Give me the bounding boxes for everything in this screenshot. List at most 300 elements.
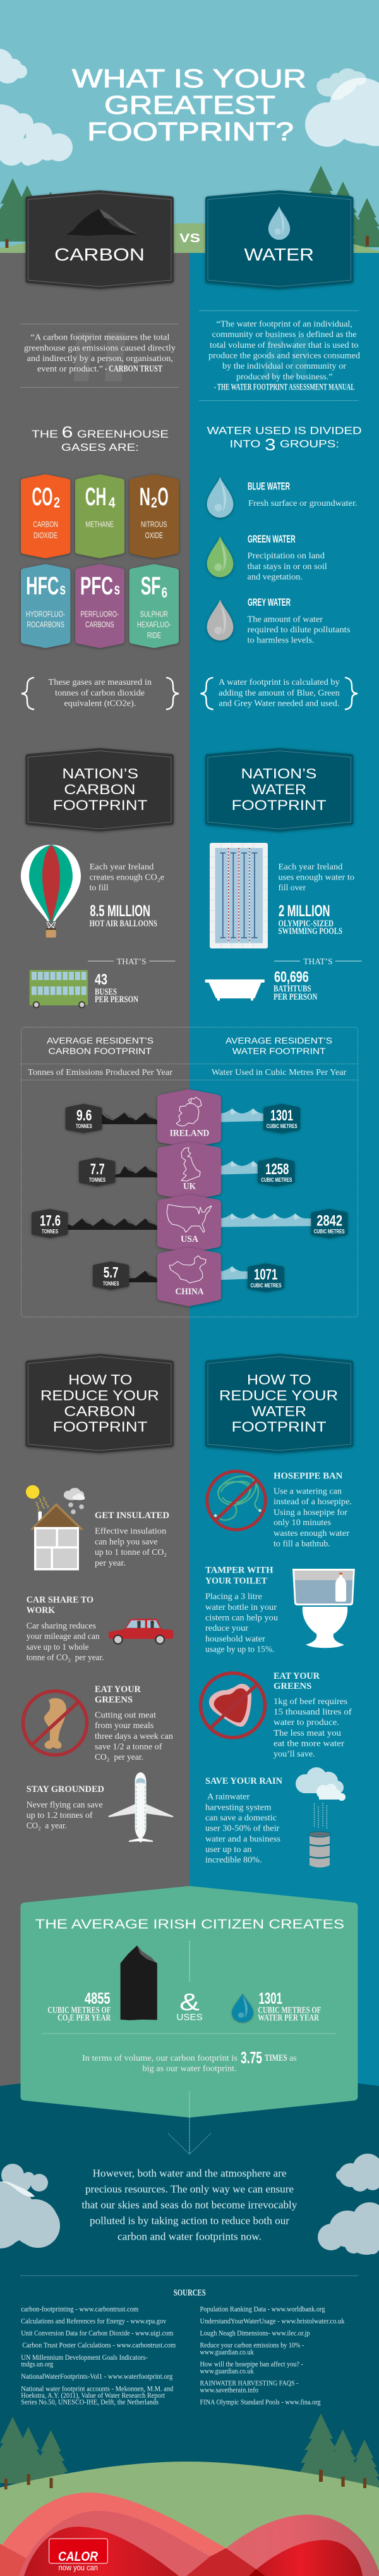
tip: car share to work: tonne of CO₂ per year. bbox=[27, 1653, 104, 1663]
text: water footprint definition bbox=[208, 320, 360, 392]
badge: nation's carbon footprint: FOOTPRINT bbox=[53, 797, 147, 813]
text: water footprint definition: by the individual or community or bbox=[222, 362, 346, 371]
tip: tamper with your toilet: YOUR TOILET bbox=[205, 1576, 267, 1586]
sources: left column: Series No.50, UNESCO-IHE, Delft, the Netherlands bbox=[21, 2399, 159, 2407]
tip: car share to work: WORK bbox=[27, 1605, 56, 1616]
icon: coal column bbox=[121, 1946, 157, 2020]
stat: 4855 bbox=[47, 1990, 111, 2023]
note: tonnes of carbon dioxide equivalent bbox=[21, 678, 179, 709]
label: that's, water bbox=[274, 957, 361, 967]
value: ireland tonnes: 9.6 bbox=[76, 1107, 92, 1124]
text: ireland water stat: OLYMPIC-SIZED bbox=[278, 919, 334, 929]
tip: save your rain bbox=[205, 1776, 283, 1865]
note: tonnes of carbon dioxide equivalent: equivalent (tCO2e). bbox=[64, 699, 136, 709]
sources: right column: www.guardian.co.uk bbox=[200, 2349, 254, 2357]
stat: bathtubs per person: 60,696 bbox=[274, 969, 309, 986]
sources: right column: Lough Neagh Dimensions- www.ilec.or.jp bbox=[200, 2330, 310, 2338]
tip: car share to work: your mileage and can bbox=[27, 1632, 100, 1641]
stat: 4855: 4855 bbox=[85, 1990, 111, 2008]
heading: average resident's water footprint: AVERAGE RESIDENT’S bbox=[226, 1036, 332, 1046]
tip: hosepipe ban bbox=[274, 1471, 352, 1549]
text: carbon footprint definition bbox=[24, 333, 176, 374]
icon: no hosepipe bbox=[207, 1471, 265, 1530]
ampersand and uses bbox=[176, 1989, 203, 2023]
text: ireland water stat: 2 MILLION bbox=[279, 902, 330, 920]
sources: right column: www.guardian.co.uk bbox=[200, 2368, 254, 2376]
sources: right column: www.savetherain.info bbox=[200, 2387, 258, 2395]
cloud: right large bbox=[305, 78, 379, 147]
icon: red car bbox=[109, 1619, 173, 1644]
quote mark: carbon bbox=[74, 333, 126, 381]
gas card: carbon dioxide: CARBON bbox=[33, 520, 58, 529]
water type: grey: required to dilute pollutants bbox=[248, 625, 350, 635]
gas card: perfluorocarbons bbox=[75, 564, 124, 648]
icon: water drop bbox=[268, 206, 290, 240]
icon: water drop bbox=[232, 1994, 253, 2022]
text: ireland co2 stat bbox=[90, 862, 164, 929]
tip: save your rain: SAVE YOUR RAIN bbox=[205, 1776, 283, 1786]
tip: get insulated bbox=[95, 1511, 169, 1568]
sources: left column: UN Millennium Development Goals Indicators- bbox=[21, 2354, 148, 2362]
gas card: perfluorocarbons: PFC bbox=[80, 572, 113, 600]
tip: eat your greens, carbon: three days a week can bbox=[95, 1732, 173, 1741]
bar: usa water waves bbox=[221, 1213, 311, 1227]
note: water footprint calculation bbox=[201, 678, 358, 709]
value: ireland tonnes: TONNES bbox=[76, 1123, 92, 1130]
bar: ireland coal mountains bbox=[102, 1112, 157, 1124]
tip: stay grounded bbox=[27, 1784, 104, 1831]
closing statement: carbon and water footprints now. bbox=[117, 2231, 262, 2243]
country: china bbox=[157, 1248, 221, 1306]
label: that's, water: THAT’S bbox=[303, 957, 333, 967]
label: carbon: CARBON bbox=[54, 245, 145, 264]
tip: eat your greens, carbon bbox=[95, 1684, 173, 1762]
cloud: dark section left highlight bbox=[0, 2181, 35, 2197]
sources: right column: Population Ranking Data - www.worldbank.org bbox=[200, 2306, 325, 2314]
tip: eat your greens, water: you’ll save. bbox=[274, 1750, 315, 1759]
tip: save your rain: harvesting system bbox=[205, 1803, 272, 1812]
stat: bathtubs per person: BATHTUBS bbox=[274, 984, 311, 994]
sources: right column: FINA Olympic Standard Pools - www.fina.org bbox=[200, 2399, 321, 2407]
comparison statement: In terms of volume, our carbon footprint is bbox=[82, 2054, 238, 2063]
gas card: hydrofluorocarbons: HYDROFLUO- bbox=[26, 610, 65, 618]
tip: get insulated: per year. bbox=[95, 1559, 126, 1568]
stat: 1301 bbox=[258, 1990, 321, 2023]
text: water footprint definition: total volume of freshwater that is used to bbox=[210, 341, 359, 350]
title: WHAT IS YOUR bbox=[72, 64, 306, 93]
value: usa tonnes: TONNES bbox=[42, 1229, 58, 1236]
value: china cubic metres: CUBIC METRES bbox=[250, 1282, 282, 1289]
tip: eat your greens, water: GREENS bbox=[274, 1681, 311, 1691]
tip: hosepipe ban: only 10 minutes bbox=[274, 1518, 331, 1528]
icon: bathtub bbox=[205, 979, 265, 1000]
heading: average resident's water footprint: WATER FOOTPRINT bbox=[232, 1046, 326, 1056]
cloud: right small translucent bbox=[316, 68, 366, 100]
tip: hosepipe ban: wastes enough water bbox=[274, 1529, 349, 1538]
tip: save your rain: water and a business bbox=[205, 1834, 280, 1844]
tree: bottom right bbox=[298, 2413, 379, 2487]
cloud: dark section right bbox=[318, 2154, 379, 2255]
tip: tamper with your toilet: TAMPER WITH bbox=[205, 1566, 274, 1576]
badge: nation's water footprint: NATION’S bbox=[241, 766, 316, 782]
country: uk bbox=[157, 1142, 221, 1201]
tip: hosepipe ban: Use a watering can bbox=[274, 1487, 342, 1496]
vs label: VS bbox=[179, 232, 200, 245]
comparison statement: big as our water footprint. bbox=[142, 2064, 237, 2074]
badge: how to reduce water footprint: WATER bbox=[251, 1403, 306, 1419]
gas card: methane bbox=[75, 474, 124, 558]
panel: water column background bbox=[190, 253, 379, 2106]
badge: nation's carbon footprint: NATION’S bbox=[62, 766, 138, 782]
heading: water divided into 3 groups: 3 bbox=[265, 435, 275, 454]
title: FOOTPRINT? bbox=[87, 117, 294, 146]
tip: car share to work: save up to 1 whole bbox=[27, 1643, 89, 1652]
water type: green: Precipitation on land bbox=[248, 551, 325, 561]
text: carbon footprint definition: and indirectly by a person, organisation, bbox=[27, 354, 173, 364]
gas card: hydrofluorocarbons: ROCARBONS bbox=[27, 620, 64, 629]
icon: airplane bbox=[109, 1772, 173, 1843]
water type: blue bbox=[207, 477, 358, 518]
tip: eat your greens, water: 15 thousand litres of bbox=[274, 1708, 352, 1717]
value: china tonnes bbox=[93, 1261, 129, 1290]
dotted dividers in summary panel bbox=[42, 1941, 336, 2033]
tree trunks: bottom bbox=[4, 2470, 366, 2489]
tree: top right bbox=[298, 166, 379, 247]
tip: eat your greens, water: eat the more water bbox=[274, 1739, 344, 1749]
heading: the 6 greenhouse gases bbox=[32, 424, 169, 453]
value: ireland cubic metres: CUBIC METRES bbox=[267, 1123, 298, 1130]
quote mark: water bbox=[263, 337, 310, 378]
value: usa cubic metres: CUBIC METRES bbox=[314, 1229, 345, 1236]
tip: get insulated: Effective insulation bbox=[95, 1527, 166, 1536]
tip: hosepipe ban: Using a hosepipe for bbox=[274, 1508, 347, 1518]
tip: eat your greens, carbon: CO₂ per year. bbox=[95, 1753, 143, 1762]
water type: green: and vegetation. bbox=[248, 573, 303, 582]
value: uk cubic metres: CUBIC METRES bbox=[261, 1177, 292, 1184]
gas card: nitrous oxide: O bbox=[158, 483, 169, 511]
tip: eat your greens, water bbox=[274, 1671, 352, 1759]
tip: eat your greens, carbon: GREENS bbox=[95, 1695, 133, 1705]
tip: eat your greens, water: water to produce. bbox=[274, 1718, 339, 1727]
cloud: upper left bbox=[0, 49, 27, 83]
country: usa bbox=[157, 1194, 221, 1253]
closing statement: polluted is by taking action to reduce both our bbox=[90, 2215, 290, 2227]
value: china tonnes: TONNES bbox=[103, 1280, 119, 1287]
hill: bottom ground bbox=[0, 2462, 379, 2576]
heading: average resident's water footprint bbox=[226, 1036, 332, 1056]
note: water footprint calculation: adding the amount of Blue, Green bbox=[219, 689, 340, 698]
stat: 4855: CUBIC METRES OF bbox=[47, 2005, 111, 2015]
sources: right column: RAINWATER HARVESTING FAQS - bbox=[200, 2380, 298, 2388]
heading: sources: SOURCES bbox=[174, 2288, 206, 2298]
tip: eat your greens, carbon: EAT YOUR bbox=[95, 1684, 141, 1695]
tip: car share to work bbox=[27, 1595, 104, 1663]
text: carbon footprint definition: - CARBON TRUST bbox=[105, 364, 162, 374]
title bbox=[72, 64, 306, 146]
value: ireland cubic metres: 1301 bbox=[270, 1107, 293, 1124]
gas card: perfluorocarbons: CARBONS bbox=[85, 620, 114, 629]
stat: 1301: CUBIC METRES OF bbox=[258, 2005, 321, 2015]
value: uk cubic metres bbox=[258, 1158, 294, 1186]
text: carbon footprint definition: “A carbon footprint measures the total bbox=[30, 333, 170, 343]
divider above sources bbox=[21, 2275, 358, 2276]
tip: car share to work: Car sharing reduces bbox=[27, 1621, 96, 1631]
value: uk tonnes: TONNES bbox=[89, 1177, 105, 1184]
gas card: hydrofluorocarbons: s bbox=[59, 579, 66, 598]
tip: get insulated: can help you save bbox=[95, 1538, 158, 1547]
text: ireland water stat: fill over bbox=[278, 883, 306, 893]
stat: buses per person: PER PERSON bbox=[95, 995, 138, 1005]
text: water footprint definition: “The water footprint of an individual, bbox=[216, 320, 352, 329]
water type: blue: Fresh surface or groundwater. bbox=[248, 499, 358, 508]
icon: toilet with bottle bbox=[292, 1569, 355, 1648]
value: uk cubic metres: 1258 bbox=[265, 1161, 289, 1178]
panel: the average irish citizen creates bbox=[20, 1886, 358, 2118]
value: uk tonnes: 7.7 bbox=[90, 1161, 105, 1178]
panel: carbon column background bbox=[0, 253, 190, 2106]
tip: tamper with your toilet: household water bbox=[205, 1635, 265, 1644]
closing statement: However, both water and the atmosphere are bbox=[93, 2168, 287, 2180]
text: ireland co2 stat: HOT AIR BALLOONS bbox=[90, 919, 157, 929]
sky background bbox=[0, 0, 379, 253]
badge: water bbox=[205, 190, 354, 289]
tip: save your rain: user 30-50% of their bbox=[205, 1824, 280, 1834]
badge: nation's water footprint bbox=[205, 748, 354, 831]
heading: the 6 greenhouse gases: THE bbox=[32, 429, 58, 440]
tip: save your rain: user up to an bbox=[205, 1845, 251, 1855]
tip: tamper with your toilet bbox=[205, 1566, 278, 1654]
tip: stay grounded: STAY GROUNDED bbox=[27, 1784, 104, 1794]
icon: insulated house bbox=[26, 1485, 85, 1571]
country: china: CHINA bbox=[176, 1287, 204, 1297]
text: ireland water stat: uses enough water to bbox=[278, 873, 354, 883]
tree: top left bbox=[0, 178, 69, 242]
sources: right column: Reduce your carbon emissions by 10% - bbox=[200, 2342, 304, 2350]
stat: 4855: CO₂E PER YEAR bbox=[57, 2013, 111, 2023]
row: china bbox=[93, 1248, 284, 1306]
sources: left column: mdgs.un.org bbox=[21, 2361, 54, 2369]
water type: green: that stays in or on soil bbox=[248, 562, 327, 572]
row: uk bbox=[79, 1142, 294, 1201]
gas card: carbon dioxide: 2 bbox=[54, 494, 60, 511]
tree: bottom left bbox=[0, 2417, 71, 2484]
sources: right column: How will the hosepipe ban affect you? - bbox=[200, 2361, 303, 2369]
tip: tamper with your toilet: water bottle in your bbox=[205, 1603, 277, 1612]
note: water footprint calculation: A water footprint is calculated by bbox=[219, 678, 340, 687]
tip: save your rain: incredible 80%. bbox=[205, 1856, 262, 1865]
water type: green: GREEN WATER bbox=[248, 533, 296, 545]
divider: water quote bbox=[200, 311, 358, 401]
icon: no beef steak bbox=[201, 1673, 265, 1738]
value: usa cubic metres: 2842 bbox=[316, 1212, 342, 1229]
stat: bathtubs per person bbox=[274, 969, 318, 1002]
bar: uk water waves bbox=[221, 1161, 258, 1175]
label: water: WATER bbox=[244, 245, 314, 264]
gas card: sulphur hexafluoride bbox=[129, 564, 179, 648]
tip: eat your greens, water: 1kg of beef requires bbox=[274, 1697, 347, 1707]
water type: grey: to harmless levels. bbox=[248, 636, 315, 645]
heading: water divided into 3 groups: INTO bbox=[230, 438, 260, 450]
tip: tamper with your toilet: reduce your bbox=[205, 1624, 248, 1633]
sources: left column: NationalWaterFootprints-Vol1 - www.waterfootprint.org bbox=[21, 2373, 173, 2381]
tree trunks: top bbox=[5, 236, 369, 248]
stat: 1301: 1301 bbox=[259, 1990, 282, 2008]
stat: bathtubs per person: PER PERSON bbox=[274, 992, 318, 1002]
note: tonnes of carbon dioxide equivalent: tonnes of carbon dioxide bbox=[55, 689, 145, 698]
sources: left column: Calculations and References for Energy - www.epa.gov bbox=[21, 2318, 167, 2326]
value: ireland tonnes bbox=[66, 1104, 102, 1133]
panel frame: average resident comparison bbox=[21, 1027, 358, 1317]
value: usa cubic metres bbox=[311, 1209, 347, 1238]
text: ireland water stat: Each year Ireland bbox=[278, 862, 342, 872]
sources: left column: Carbon Trust Poster Calculations - www.carbontrust.com bbox=[22, 2342, 176, 2350]
country: ireland bbox=[157, 1089, 221, 1148]
sources: left column bbox=[21, 2306, 176, 2407]
badge: how to reduce water footprint: HOW TO bbox=[247, 1372, 311, 1387]
gas card: hydrofluorocarbons: HFC bbox=[26, 572, 59, 600]
gas card: perfluorocarbons: PERFLUORO- bbox=[81, 610, 119, 618]
tip: tamper with your toilet: cistern can help you bbox=[205, 1614, 278, 1622]
country: ireland: IRELAND bbox=[170, 1129, 209, 1139]
bar: china water waves bbox=[221, 1267, 248, 1280]
country: usa: USA bbox=[181, 1234, 199, 1244]
text: ireland co2 stat: Each year Ireland bbox=[90, 862, 153, 872]
panel heading: THE AVERAGE IRISH CITIZEN CREATES bbox=[35, 1917, 344, 1932]
value: china cubic metres bbox=[248, 1263, 284, 1292]
comparison statement: 3.75 bbox=[241, 2048, 262, 2067]
icon: swimming pool bbox=[210, 843, 268, 948]
heading: average resident's carbon footprint: CARBON FOOTPRINT bbox=[48, 1046, 152, 1056]
text: ireland co2 stat: 8.5 MILLION bbox=[90, 902, 150, 920]
badge: how to reduce carbon footprint: REDUCE YOUR bbox=[40, 1387, 159, 1403]
cloud: lower left bbox=[0, 104, 73, 166]
comparison statement: TIMES bbox=[265, 2053, 287, 2063]
label: that's, carbon: THAT’S bbox=[117, 957, 147, 967]
gas card: sulphur hexafluoride: SULPHUR bbox=[140, 610, 168, 618]
value: usa tonnes: 17.6 bbox=[40, 1212, 61, 1229]
badge: how to reduce carbon footprint: FOOTPRINT bbox=[53, 1419, 147, 1435]
closing statement: precious resources. The only way we can ensure bbox=[85, 2183, 294, 2195]
badge: how to reduce carbon footprint: CARBON bbox=[64, 1403, 135, 1419]
stat: 1301: WATER PER YEAR bbox=[258, 2013, 319, 2023]
heading: the 6 greenhouse gases: GREENHOUSE bbox=[77, 429, 169, 440]
water type: grey: The amount of water bbox=[248, 615, 323, 625]
text: ireland co2 stat: to fill bbox=[90, 883, 109, 893]
gas card: methane: 4 bbox=[109, 494, 116, 511]
sources: left column: Hoekstra, A.Y. (2011), Value of Water Research Report bbox=[21, 2392, 165, 2400]
logo: calor bbox=[49, 2539, 107, 2572]
icon: no chicken leg bbox=[23, 1691, 87, 1755]
text: carbon footprint definition: greenhouse gas emissions caused directly bbox=[24, 343, 176, 353]
tip: stay grounded: Never flying can save bbox=[27, 1800, 103, 1810]
text: ireland water stat: SWIMMING POOLS bbox=[278, 926, 342, 936]
gas card: carbon dioxide: DIOXIDE bbox=[33, 531, 57, 540]
tip: hosepipe ban: HOSEPIPE BAN bbox=[274, 1471, 343, 1481]
value: uk tonnes bbox=[79, 1158, 115, 1186]
sources: left column: National water footprint accounts - Mekonnen, M.M. and bbox=[21, 2385, 174, 2393]
hill: top ground bbox=[0, 223, 379, 253]
sources: right column: UnderstandYourWaterUsage - www.bristolwater.co.uk bbox=[200, 2318, 345, 2326]
water type: grey: GREY WATER bbox=[248, 596, 291, 608]
title: GREATEST bbox=[104, 90, 275, 120]
divider: carbon quote bbox=[21, 324, 179, 387]
heading: average resident's carbon footprint bbox=[47, 1036, 153, 1056]
badge: nation's water footprint: WATER bbox=[251, 782, 306, 797]
water type: green bbox=[207, 533, 327, 582]
tip: stay grounded: CO₂ a year. bbox=[27, 1822, 67, 1831]
stat: buses per person: 43 bbox=[95, 971, 107, 988]
heading: water divided into 3 groups: WATER USED IS DIVIDED bbox=[207, 425, 362, 437]
bar: uk coal mountains bbox=[115, 1166, 157, 1177]
gas card: nitrous oxide: OXIDE bbox=[145, 531, 163, 540]
text: water footprint definition: community or business is defined as the bbox=[212, 330, 357, 340]
logo swoosh bbox=[0, 2493, 379, 2576]
tip: eat your greens, water: The less meat you bbox=[274, 1729, 341, 1738]
gas card: nitrous oxide bbox=[129, 474, 179, 558]
arrow: dotted down arrow bbox=[168, 2092, 211, 2154]
gas card: sulphur hexafluoride: SF bbox=[141, 572, 160, 600]
row: ireland bbox=[66, 1089, 300, 1148]
ampersand and uses: USES bbox=[176, 2012, 203, 2023]
tip: hosepipe ban: to fill a bathtub. bbox=[274, 1540, 330, 1549]
tip: hosepipe ban: instead of a hosepipe. bbox=[274, 1497, 352, 1507]
badge: how to reduce carbon footprint: HOW TO bbox=[68, 1372, 132, 1387]
tip: save your rain: can save a domestic bbox=[205, 1813, 277, 1823]
gas card: nitrous oxide: 2 bbox=[151, 494, 157, 511]
row: usa bbox=[32, 1194, 347, 1253]
country: uk: UK bbox=[183, 1181, 196, 1191]
tip: eat your greens, carbon: save 1/2 a tonne of bbox=[95, 1743, 162, 1752]
gas card: perfluorocarbons: s bbox=[114, 579, 120, 598]
gas card: sulphur hexafluoride: 6 bbox=[162, 584, 167, 601]
sources: left column: carbon-footprinting - www.carbontrust.com bbox=[21, 2306, 138, 2314]
note: water footprint calculation: and Grey Water needed and used. bbox=[219, 699, 339, 709]
water type: blue: BLUE WATER bbox=[248, 481, 290, 493]
gas card: methane: METHANE bbox=[86, 520, 114, 529]
tip: tamper with your toilet: Placing a 3 litre bbox=[205, 1592, 262, 1602]
tip: tamper with your toilet: usage by up to 15%. bbox=[205, 1645, 274, 1654]
heading: water divided into 3 groups bbox=[207, 425, 362, 454]
gas card: nitrous oxide: NITROUS bbox=[141, 520, 167, 529]
badge: how to reduce water footprint bbox=[205, 1354, 354, 1453]
badge: how to reduce water footprint: FOOTPRINT bbox=[232, 1419, 327, 1435]
stat: buses per person bbox=[95, 971, 138, 1005]
tip: eat your greens, water: EAT YOUR bbox=[274, 1671, 320, 1681]
ampersand and uses: & bbox=[179, 1989, 200, 2016]
gas card: methane: CH bbox=[85, 483, 106, 511]
text: ireland water stat bbox=[278, 862, 354, 936]
tip: get insulated: GET INSULATED bbox=[95, 1511, 169, 1521]
badge: how to reduce carbon footprint bbox=[25, 1354, 174, 1453]
tip: eat your greens, carbon: from your meals bbox=[95, 1721, 153, 1731]
value: usa tonnes bbox=[32, 1209, 68, 1238]
bar: china coal mountains bbox=[129, 1271, 157, 1282]
text: ireland co2 stat: creates enough CO₂e bbox=[90, 873, 164, 883]
icon: bus bbox=[30, 970, 88, 1008]
text: water footprint definition: produced by the business.” bbox=[236, 372, 333, 382]
icon: coal lump bbox=[66, 209, 140, 236]
axis label: tonnes of emissions: Tonnes of Emissions Produced Per Year bbox=[28, 1068, 172, 1077]
tip: get insulated: up to 1 tonne of CO₂ bbox=[95, 1548, 167, 1557]
value: china tonnes: 5.7 bbox=[104, 1265, 119, 1281]
tip: stay grounded: up to 1.2 tonnes of bbox=[27, 1811, 93, 1820]
gas card: nitrous oxide: N bbox=[140, 483, 150, 511]
tip: eat your greens, carbon: Cutting out meat bbox=[95, 1711, 156, 1720]
gas card: hydrofluorocarbons bbox=[21, 564, 70, 648]
badge: nation's water footprint: FOOTPRINT bbox=[232, 797, 327, 813]
tip: car share to work: CAR SHARE TO bbox=[27, 1595, 93, 1605]
heading: average resident's carbon footprint: AVERAGE RESIDENT’S bbox=[47, 1036, 153, 1046]
